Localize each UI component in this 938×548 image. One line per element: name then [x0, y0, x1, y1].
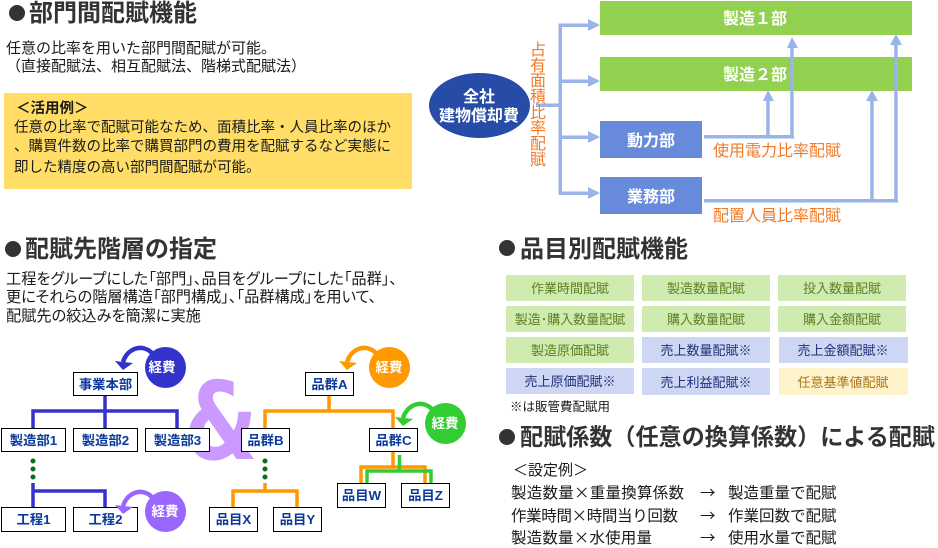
box: operations dept: 業務部: [627, 188, 675, 206]
cell: [642, 275, 770, 301]
box: group C: [370, 428, 418, 452]
dots: omitted levels: [262, 458, 268, 480]
heading: item allocation: 品目別配賦機能: [520, 236, 688, 263]
cell: 作業時間配賦: [531, 281, 609, 296]
box: item X: 品目X: [216, 512, 251, 527]
text block: hierarchy description: 更にそれらの階層構造「部門構成」、「品群構成」を用いて、: [6, 289, 376, 306]
box: dept 1: [2, 428, 66, 452]
callout: usage example: 即した精度の高い部門間配賦が可能。: [14, 159, 260, 176]
text block: description: [6, 40, 306, 75]
label: floor area ratio allocation: 配: [530, 135, 546, 153]
cell: [778, 275, 906, 301]
label: floor area ratio allocation: 率: [530, 119, 546, 137]
box: group A: 品群A: [311, 376, 348, 392]
heading: allocation coefficients: 配賦係数（任意の換算係数）による配賦: [520, 424, 935, 450]
cell: 売上原価配賦※: [524, 374, 616, 389]
grid: allocation methods: [506, 275, 908, 395]
box: item W: 品目W: [342, 488, 382, 503]
connectors: floor area allocation: [536, 19, 600, 199]
flow diagram: building depreciation allocation: [429, 1, 912, 225]
icon: expense badge green: [395, 403, 466, 444]
panel: allocation coefficients: [499, 424, 935, 548]
cell: 購入数量配賦: [667, 312, 745, 327]
cell: [642, 368, 770, 395]
cell: 売上数量配賦※: [660, 343, 752, 358]
dots: omitted levels: [30, 458, 36, 480]
cell: 売上利益配賦※: [660, 375, 752, 390]
cell: [506, 306, 634, 332]
footnote: ※は販管費配賦用: [510, 399, 610, 414]
text block: hierarchy description: 工程をグループにした「部門」、品目をグループにした「品群」、: [6, 271, 397, 288]
cell: 製造･購入数量配賦: [515, 312, 625, 327]
text block: description: 任意の比率を用いた部門間配賦が可能。: [6, 40, 276, 57]
box: item Z: [402, 484, 450, 508]
text block: setting examples: 製造重量で配賦: [728, 481, 837, 503]
cell: [642, 337, 770, 363]
callout: usage example: ＜活用例＞: [16, 100, 88, 117]
heading: allocation hierarchy: 配賦先階層の指定: [25, 236, 217, 263]
chart: department tree: [2, 347, 210, 532]
heading: inter-department allocation: 部門間配賦機能: [29, 0, 197, 27]
icon: expense badge blue: [115, 347, 186, 388]
label: power usage ratio allocation: 使用電力比率配賦: [713, 142, 841, 160]
text block: setting examples: →: [700, 481, 716, 503]
cell: [506, 275, 634, 301]
cell: 任意基準値配賦: [797, 375, 889, 390]
cell: [779, 337, 908, 363]
box: group A: [306, 372, 354, 396]
connectors: product tree orange: [233, 395, 425, 507]
callout: usage example: 任意の比率で配賦可能なため、面積比率・人員比率のほか: [14, 119, 391, 136]
box: item Y: [274, 508, 322, 532]
callout: usage example: 、購買件数の比率で購買部門の費用を配賦するなど実態に: [14, 138, 391, 155]
cell: [778, 306, 906, 332]
arrows: power usage allocation: [704, 37, 798, 138]
box: group B: [242, 428, 290, 452]
cell: 購入金額配賦: [803, 312, 881, 327]
node: company-wide depreciation: 全社: [463, 87, 495, 106]
label: floor area ratio allocation: [530, 41, 546, 169]
icon: expense badge purple: [115, 491, 186, 532]
text block: description: （直接配賦法、相互配賦法、階梯式配賦法）: [6, 58, 306, 75]
box: process 2: 工程2: [88, 512, 123, 527]
box: item X: [210, 508, 258, 532]
box: item Z: 品目Z: [408, 488, 443, 503]
box: item W: [338, 484, 386, 508]
box: dept 2: 製造部2: [82, 433, 129, 448]
box: process 1: 工程1: [16, 512, 51, 527]
panel: allocation hierarchy: [2, 236, 466, 532]
cell: [506, 368, 634, 394]
text block: hierarchy description: 配賦先の絞込みを簡潔に実施: [6, 307, 201, 325]
connectors: department tree: [33, 395, 177, 507]
box: dept 3: 製造部3: [154, 433, 201, 448]
box: business headquarters: 事業本部: [79, 376, 132, 392]
box: dept 2: [74, 428, 138, 452]
box: manufacturing dept 1: [600, 1, 912, 35]
box: process 2: [74, 508, 138, 532]
cell: [779, 368, 908, 395]
arrows: headcount allocation: [704, 34, 902, 202]
cell: 製造原価配賦: [531, 343, 609, 358]
cell: 投入数量配賦: [803, 281, 881, 296]
text block: setting examples: 製造数量×水使用量: [511, 526, 652, 548]
text block: setting examples: [511, 459, 837, 548]
label: headcount ratio allocation: 配置人員比率配賦: [713, 207, 841, 225]
chart: product group tree: [210, 347, 466, 532]
box: power dept: 動力部: [627, 132, 675, 150]
text block: setting examples: 製造数量×重量換算係数: [511, 481, 684, 503]
label: floor area ratio allocation: 有: [530, 57, 546, 75]
icon: expense badge orange: 経費: [376, 359, 402, 375]
box: dept 1: 製造部1: [10, 433, 58, 448]
box: group C: 品群C: [375, 432, 412, 448]
cell: [506, 337, 634, 363]
box: operations dept: [600, 177, 702, 214]
icon: expense badge blue: 経費: [148, 359, 176, 375]
panel: inter-department allocation: [4, 0, 412, 189]
node: company-wide depreciation: [429, 73, 530, 138]
node: company-wide depreciation: 建物償却費: [439, 106, 519, 125]
cell: 売上金額配賦※: [797, 343, 889, 358]
box: group B: 品群B: [247, 432, 284, 448]
cell: 製造数量配賦: [667, 281, 745, 296]
text block: setting examples: 使用水量で配賦: [728, 526, 837, 548]
box: manufacturing dept 2: 製造２部: [723, 66, 787, 84]
text block: setting examples: →: [700, 504, 716, 526]
box: item Y: 品目Y: [280, 512, 315, 527]
ampersand: &: [184, 359, 257, 485]
label: floor area ratio allocation: 比: [530, 104, 546, 122]
icon: expense badge green: 経費: [432, 415, 458, 431]
text block: setting examples: →: [700, 526, 716, 548]
label: floor area ratio allocation: 賦: [530, 151, 546, 169]
text block: setting examples: 作業回数で配賦: [728, 504, 837, 526]
label: floor area ratio allocation: 面: [530, 73, 546, 90]
box: business headquarters: [74, 372, 138, 396]
label: floor area ratio allocation: 積: [530, 88, 546, 106]
panel: item allocation: [499, 236, 908, 414]
label: floor area ratio allocation: 占: [530, 41, 546, 59]
text block: setting examples: 作業時間×時間当り回数: [511, 504, 678, 526]
icon: expense badge purple: 経費: [152, 503, 178, 519]
text block: hierarchy description: [6, 271, 397, 325]
connectors: product tree green: [367, 455, 431, 483]
box: dept 3: [146, 428, 210, 452]
box: power dept: [600, 121, 702, 158]
box: manufacturing dept 2: [600, 57, 912, 91]
callout: usage example: [4, 93, 412, 189]
cell: [642, 306, 770, 332]
icon: expense badge orange: [339, 347, 410, 388]
box: process 1: [2, 508, 66, 532]
text block: setting examples: ＜設定例＞: [513, 459, 588, 480]
box: manufacturing dept 1: 製造１部: [723, 10, 787, 28]
